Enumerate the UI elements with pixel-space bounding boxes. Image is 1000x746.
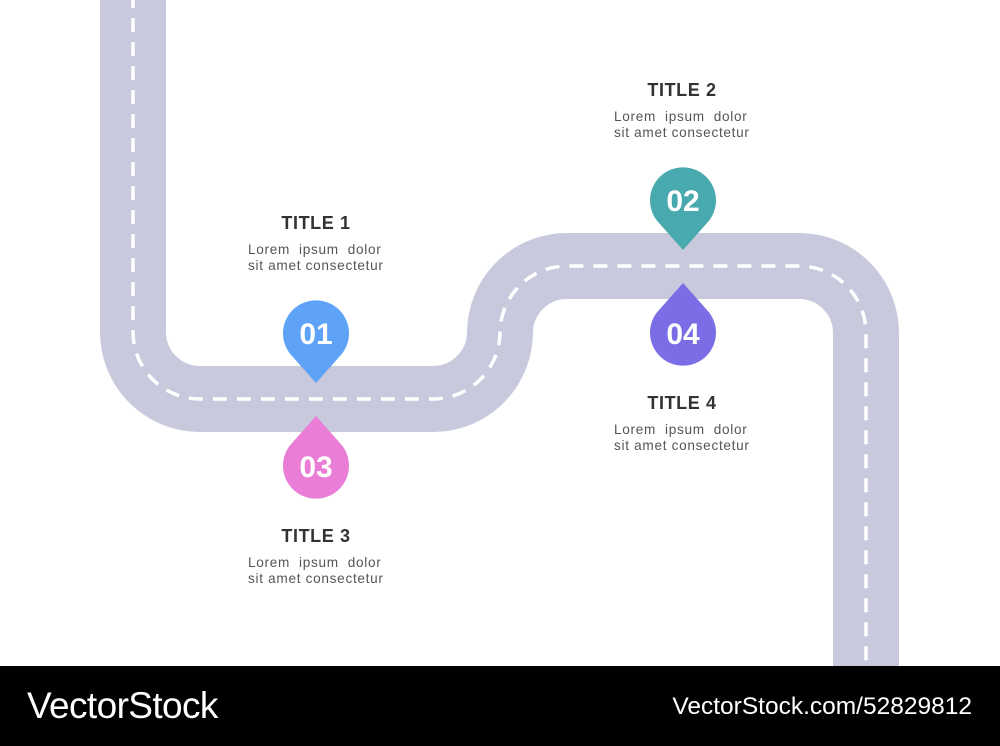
text: title 1: sit amet consectetur <box>248 258 384 273</box>
pin 01 <box>283 300 349 383</box>
footer logo: VectorStock <box>27 685 218 726</box>
pin 04 <box>650 283 716 366</box>
pin 02 <box>650 167 716 250</box>
text: title 4: TITLE 4 <box>647 393 717 413</box>
text: title 4 <box>614 393 750 453</box>
text: title 4: Lorem ipsum dolor <box>614 422 747 437</box>
pin 03 <box>283 416 349 499</box>
text: title 3 <box>248 526 384 586</box>
text: title 2: Lorem ipsum dolor <box>614 109 747 124</box>
pin 04: 04 <box>666 318 700 351</box>
text: title 3: Lorem ipsum dolor <box>248 555 381 570</box>
text: title 2: sit amet consectetur <box>614 125 750 140</box>
text: title 2 <box>614 80 750 140</box>
text: title 1 <box>248 213 384 273</box>
footer bar <box>0 666 1000 746</box>
text: title 3: sit amet consectetur <box>248 571 384 586</box>
text: title 3: TITLE 3 <box>281 526 351 546</box>
pin 03: 03 <box>299 451 333 484</box>
pin 01: 01 <box>299 318 333 351</box>
pin 02: 02 <box>666 185 700 218</box>
text: title 1: TITLE 1 <box>281 213 351 233</box>
footer url: VectorStock.com/52829812 <box>672 693 972 720</box>
text: title 4: sit amet consectetur <box>614 438 750 453</box>
text: title 2: TITLE 2 <box>647 80 717 100</box>
text: title 1: Lorem ipsum dolor <box>248 242 381 257</box>
